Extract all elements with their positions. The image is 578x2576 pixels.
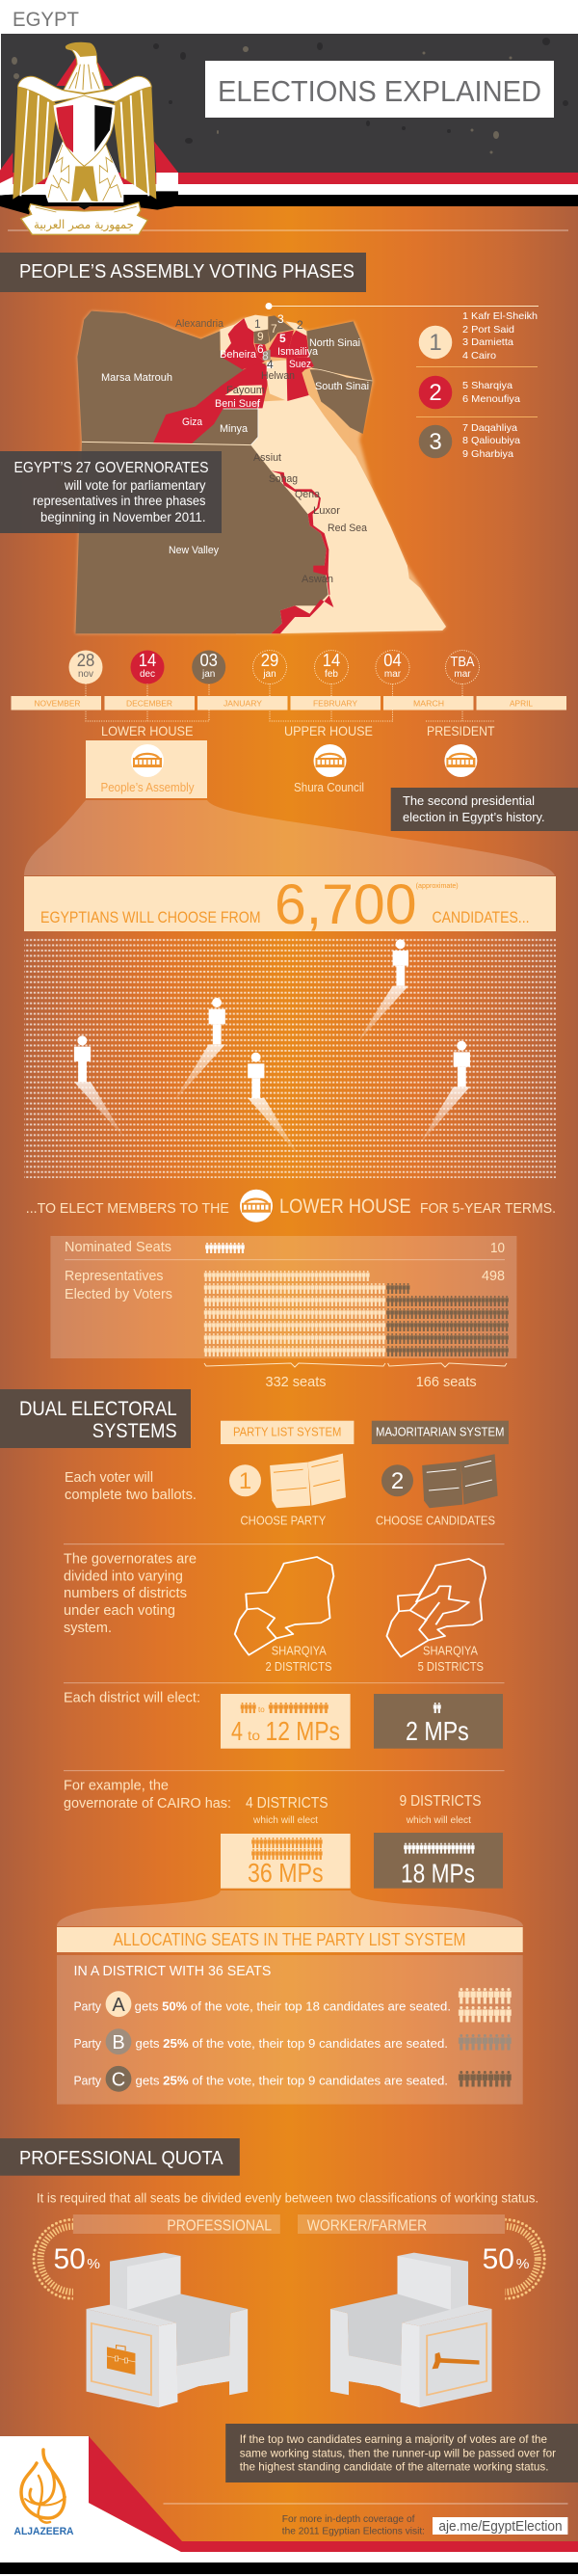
- map: Sharqiya 5 districts: SHARQIYA: [423, 1645, 479, 1658]
- label: 9 districts: 9 DISTRICTS: [399, 1793, 482, 1810]
- chair: worker/farmer: [330, 2253, 492, 2407]
- map labels: [101, 312, 369, 585]
- party B row: Party: [73, 2036, 101, 2051]
- more coverage text: For more in-depth coverage of: [282, 2513, 415, 2525]
- heading: dual electoral systems: SYSTEMS: [92, 1420, 177, 1442]
- heading: professional quota: PROFESSIONAL QUOTA: [19, 2148, 223, 2169]
- map: Sharqiya 5 districts: [386, 1559, 486, 1674]
- People's Assembly box: People’s Assembly: [100, 781, 195, 794]
- phase 3: 8 Qalioubiya: [462, 435, 520, 446]
- footer white block and red stripe: [0, 2436, 578, 2574]
- title box: [205, 61, 554, 118]
- emblem ribbon arabic text: جمهورية مصر العربية: [34, 217, 134, 232]
- phase 1: 2 Port Said: [462, 324, 514, 335]
- heading: allocating seats: ALLOCATING SEATS IN THE PARTY LIST SYSTEM: [114, 1930, 466, 1949]
- phase 3: [419, 422, 520, 460]
- lower house statement: LOWER HOUSE: [279, 1195, 411, 1218]
- house labels: PRESIDENT: [427, 723, 495, 738]
- url box: aje.me/EgyptElection: [438, 2518, 563, 2535]
- lower house statement: FOR 5-YEAR TERMS.: [420, 1200, 556, 1217]
- figure 1: [355, 939, 408, 1044]
- date 14 dec: [131, 650, 164, 684]
- map labels: Helwan: [261, 370, 295, 382]
- candidates banner: CANDIDATES...: [432, 908, 530, 926]
- month bars: FEBRUARY: [313, 698, 357, 708]
- date 04 mar: mar: [384, 669, 402, 680]
- date TBA mar: mar: [454, 669, 471, 680]
- phase 2: 5 Sharqiya: [462, 380, 512, 391]
- icon: briefcase: [107, 2346, 135, 2375]
- date 03 jan: [192, 650, 225, 684]
- note: runner-up rule: same working status, then the runner-up will be passed over for: [240, 2446, 556, 2459]
- date 28 nov: 28: [77, 651, 94, 670]
- callout: 27 governorates: EGYPT’S 27 GOVERNORATES: [13, 460, 208, 476]
- text: Cairo example: For example, the: [64, 1778, 169, 1794]
- date 29 jan: 29: [261, 651, 278, 670]
- header band: [0, 34, 578, 206]
- label: 4 districts: 4 DISTRICTS: [246, 1795, 328, 1811]
- box: 4 to 12 MPs: [221, 1694, 351, 1749]
- date 14 dec: 14: [139, 651, 156, 670]
- text: two ballots: complete two ballots.: [65, 1487, 197, 1503]
- map: Sharqiya 2 districts: [235, 1557, 333, 1674]
- callout: 27 governorates: [0, 451, 222, 533]
- label: 4 districts: which will elect: [252, 1814, 318, 1826]
- box: 36 MPs: [221, 1834, 351, 1889]
- map: Sharqiya 2 districts: SHARQIYA: [272, 1645, 327, 1658]
- box: 36 MPs: 36 MPs: [248, 1858, 324, 1888]
- party B row: gets 25% of the vote, their top 9 candidates are seated.: [135, 2036, 448, 2051]
- month bars: APRIL: [510, 698, 533, 708]
- panel: seat breakdown: Representatives: [65, 1268, 164, 1284]
- map labels: 8: [262, 349, 269, 362]
- label: 9 districts: [399, 1793, 482, 1826]
- map labels: 4: [267, 358, 274, 371]
- more coverage text: [282, 2513, 425, 2536]
- map labels: South Sinai: [315, 381, 369, 392]
- party C row: C: [112, 2069, 125, 2090]
- phase 2: 6 Menoufiya: [462, 393, 520, 405]
- gauge left 50%: %: [87, 2256, 100, 2272]
- label: party list system: PARTY LIST SYSTEM: [233, 1425, 341, 1438]
- timeline connectors: [86, 684, 494, 721]
- date 28 nov: [69, 650, 102, 684]
- title box: ELECTIONS EXPLAINED: [218, 74, 541, 108]
- house labels: [101, 723, 495, 738]
- gauge left 50%: [33, 2218, 100, 2300]
- note: runner-up rule: If the top two candidates earning a majority of votes are of the: [240, 2432, 547, 2446]
- date 14 feb: 14: [323, 651, 340, 670]
- map: Red Sea cream region: [236, 393, 446, 633]
- panel: party list allocation: [57, 1955, 523, 2105]
- date 29 jan: jan: [262, 669, 276, 680]
- date 29 jan: [252, 650, 287, 684]
- phase 3: 9 Gharbiya: [462, 448, 513, 460]
- map labels: 9: [257, 330, 264, 343]
- lower house statement: [26, 1190, 556, 1222]
- ballot 1: 1: [239, 1468, 251, 1494]
- panel: seat breakdown: Nominated Seats: [65, 1239, 171, 1255]
- house labels: LOWER HOUSE: [101, 723, 193, 738]
- text: governorates divided: The governorates are: [64, 1551, 197, 1568]
- heading: allocating seats: [57, 1927, 523, 1952]
- date TBA mar: TBA: [451, 654, 474, 670]
- seat brackets: 332 seats: [266, 1374, 326, 1390]
- map of Egypt: [75, 311, 446, 633]
- panel: seat breakdown: 498: [482, 1268, 505, 1284]
- candidates banner: EGYPTIANS WILL CHOOSE FROM: [40, 908, 261, 926]
- ballot 1: [229, 1454, 346, 1528]
- date TBA mar: [445, 650, 480, 684]
- party C row: gets 25% of the vote, their top 9 candidates are seated.: [135, 2073, 448, 2087]
- gauge right 50%: 50: [483, 2243, 514, 2275]
- pictogram: nominated seats: [205, 1243, 245, 1253]
- figure 3: [74, 1035, 125, 1140]
- date 14 feb: [314, 650, 349, 684]
- house labels: UPPER HOUSE: [284, 723, 373, 738]
- month bars: MARCH: [413, 698, 444, 708]
- text: governorates divided: [64, 1551, 197, 1636]
- text: governorates divided: under each voting: [64, 1602, 175, 1619]
- phase 2: 2: [429, 380, 442, 406]
- more coverage text: the 2011 Egyptian Elections visit:: [282, 2525, 425, 2536]
- box: 18 MPs: [374, 1833, 503, 1889]
- banner: worker/farmer: [298, 2214, 505, 2234]
- funnel from People's Assembly: [24, 800, 555, 875]
- text: governorates divided: numbers of districts: [64, 1585, 187, 1601]
- timeline: [12, 650, 566, 721]
- month bars: DECEMBER: [126, 698, 172, 708]
- heading: People's Assembly voting phases: PEOPLE’S ASSEMBLY VOTING PHASES: [19, 261, 355, 282]
- dot grid of candidates: [24, 937, 556, 1178]
- party A row: [73, 1988, 512, 2023]
- map labels: 1: [254, 317, 261, 331]
- candidates banner: [24, 873, 556, 936]
- date 03 jan: jan: [201, 669, 215, 680]
- pale divider: [8, 229, 568, 231]
- banner: professional: PROFESSIONAL: [167, 2217, 272, 2234]
- map labels: Giza: [182, 416, 203, 428]
- figure 2: [173, 998, 225, 1102]
- icon: Egyptian eagle emblem: [0, 42, 178, 234]
- map labels: Assiut: [253, 452, 281, 464]
- panel: seat breakdown: 10: [490, 1240, 505, 1256]
- month bars: JANUARY: [223, 698, 262, 708]
- callout: second presidential election: [391, 788, 578, 831]
- text: each district will elect: Each district will elect:: [64, 1690, 200, 1706]
- pictogram: elected seats: [204, 1271, 509, 1356]
- heading: dual electoral systems: [0, 1389, 191, 1448]
- icon: hammer: [433, 2352, 480, 2369]
- text: governorates divided: system.: [64, 1620, 112, 1636]
- heading: professional quota: [0, 2138, 240, 2176]
- note: runner-up rule: [225, 2424, 578, 2482]
- map: delta governorates: [220, 318, 244, 357]
- map labels: Beni Suef: [215, 398, 261, 410]
- map labels: Minya: [220, 423, 249, 435]
- box: 2 MPs: 2 MPs: [406, 1716, 469, 1746]
- box: 4 to 12 MPs: 12 MPs: [266, 1716, 340, 1746]
- map labels: Alexandria: [175, 318, 224, 330]
- text: two ballots: [65, 1469, 197, 1503]
- map labels: New Valley: [169, 545, 219, 556]
- panel: seat breakdown: Elected by Voters: [65, 1286, 172, 1302]
- label: 4 districts: [246, 1795, 328, 1826]
- box: 2 MPs: [374, 1694, 503, 1749]
- box: 4 to 12 MPs: 4: [231, 1716, 243, 1746]
- party B row: [73, 2028, 512, 2054]
- box: 4 to 12 MPs: to: [248, 1728, 260, 1743]
- phase 3: 3: [429, 429, 442, 455]
- People's Assembly box: [86, 740, 207, 798]
- label: majoritarian system: MAJORITARIAN SYSTEM: [376, 1425, 505, 1438]
- panel: seat breakdown: [50, 1236, 516, 1358]
- callout: 27 governorates: beginning in November 2011.: [40, 510, 206, 524]
- map labels: Beheira: [220, 349, 257, 361]
- map labels: 7: [271, 322, 277, 335]
- ballot 2: CHOOSE CANDIDATES: [376, 1514, 495, 1528]
- ballot 1: CHOOSE PARTY: [241, 1514, 327, 1528]
- label: party list system: [221, 1421, 354, 1444]
- party A row: A: [112, 1995, 125, 2016]
- date 28 nov: nov: [78, 669, 93, 680]
- date 04 mar: 04: [383, 651, 402, 670]
- month bars: NOVEMBER: [35, 698, 81, 708]
- party B row: B: [112, 2032, 125, 2053]
- lower house statement: ...TO ELECT MEMBERS TO THE: [26, 1200, 229, 1217]
- map labels: 2: [297, 318, 303, 332]
- map labels: 6: [257, 342, 264, 356]
- chair: professional: [87, 2253, 248, 2407]
- phase 1: 4 Cairo: [462, 350, 496, 362]
- label: majoritarian system: [372, 1421, 509, 1444]
- phase 3: 7 Daqahliya: [462, 422, 517, 434]
- heading: dual electoral systems: DUAL ELECTORAL: [19, 1398, 177, 1420]
- map: Sharqiya 2 districts: 2 DISTRICTS: [266, 1660, 331, 1674]
- date 14 feb: feb: [325, 669, 338, 680]
- party C row: [73, 2066, 512, 2092]
- panel: party list allocation: IN A DISTRICT WITH 36 SEATS: [73, 1963, 271, 1979]
- map labels: 3: [277, 312, 284, 326]
- map labels: Sohag: [269, 473, 298, 485]
- figure 4: [248, 1053, 299, 1155]
- callout: 27 governorates: representatives in three phases: [33, 494, 206, 508]
- map labels: 5: [279, 332, 286, 345]
- month bars: [12, 696, 566, 710]
- map labels: Luxor: [313, 505, 340, 517]
- map labels: Ismailiya: [277, 346, 319, 358]
- Shura Council: [294, 744, 364, 794]
- gauge left 50%: 50: [54, 2243, 86, 2275]
- callout: second presidential election: The second presidential: [403, 794, 535, 808]
- date 04 mar: [376, 650, 409, 684]
- candidates banner: 6,700: [275, 873, 416, 936]
- seat brackets: 166 seats: [416, 1374, 477, 1390]
- map: Sharqiya 5 districts: 5 DISTRICTS: [418, 1660, 484, 1674]
- phase 1: 1: [429, 330, 442, 356]
- Al Jazeera logo: [13, 2450, 74, 2537]
- date 03 jan: 03: [199, 651, 218, 670]
- box: 18 MPs: 18 MPs: [401, 1859, 475, 1889]
- candidates banner: (approximate): [416, 883, 459, 890]
- map labels: Suez: [289, 359, 311, 370]
- Shura Council: Shura Council: [294, 781, 364, 794]
- callout: second presidential election: election in Egypt’s history.: [403, 811, 545, 824]
- party C row: Party: [73, 2073, 101, 2087]
- legend: voting phases: [266, 303, 539, 460]
- note: runner-up rule: the highest standing candidate of the alternate working status.: [240, 2460, 549, 2474]
- icon: President building: [444, 744, 477, 777]
- phase 2: [419, 376, 520, 409]
- text: governorates divided: divided into varying: [64, 1568, 183, 1584]
- figure 5: [418, 1041, 470, 1145]
- candidate figures: [74, 939, 470, 1155]
- banner: professional: [73, 2214, 280, 2234]
- box: 4 to 12 MPs: to: [258, 1705, 265, 1714]
- map labels: Qena: [295, 489, 321, 500]
- label: 9 districts: which will elect: [406, 1814, 471, 1826]
- callout: 27 governorates: will vote for parliamentary: [64, 478, 206, 493]
- gauge right 50%: [484, 2217, 546, 2300]
- map labels: Red Sea: [328, 523, 368, 534]
- map labels: Marsa Matrouh: [101, 372, 172, 384]
- map labels: North Sinai: [309, 337, 360, 349]
- heading: People's Assembly voting phases: [0, 253, 366, 292]
- phase 1: 3 Damietta: [462, 336, 513, 348]
- phase 1: 1 Kafr El-Sheikh: [462, 310, 538, 322]
- seat brackets: [204, 1363, 507, 1390]
- ballot 2: [376, 1454, 498, 1528]
- funnel to party list: [57, 1891, 523, 1926]
- text: Cairo example: governorate of CAIRO has:: [64, 1795, 231, 1811]
- map labels: Fayoum: [226, 385, 265, 396]
- text: Cairo example: [64, 1778, 231, 1811]
- gauge right 50%: %: [516, 2256, 530, 2272]
- Al Jazeera logo: ALJAZEERA: [13, 2526, 74, 2537]
- ballot 2: 2: [391, 1468, 404, 1494]
- text: working status requirement: It is required that all seats be divided evenly between two classifications of working status.: [37, 2190, 539, 2205]
- phase 1: [419, 310, 538, 362]
- party A row: Party: [73, 1999, 101, 2014]
- banner: worker/farmer: WORKER/FARMER: [307, 2217, 427, 2234]
- kicker: EGYPT: EGYPT: [13, 9, 79, 31]
- text: two ballots: Each voter will: [65, 1469, 153, 1486]
- map labels: Aswan: [302, 574, 333, 585]
- party A row: gets 50% of the vote, their top 18 candidates are seated.: [135, 1999, 451, 2014]
- date 14 dec: dec: [140, 669, 155, 680]
